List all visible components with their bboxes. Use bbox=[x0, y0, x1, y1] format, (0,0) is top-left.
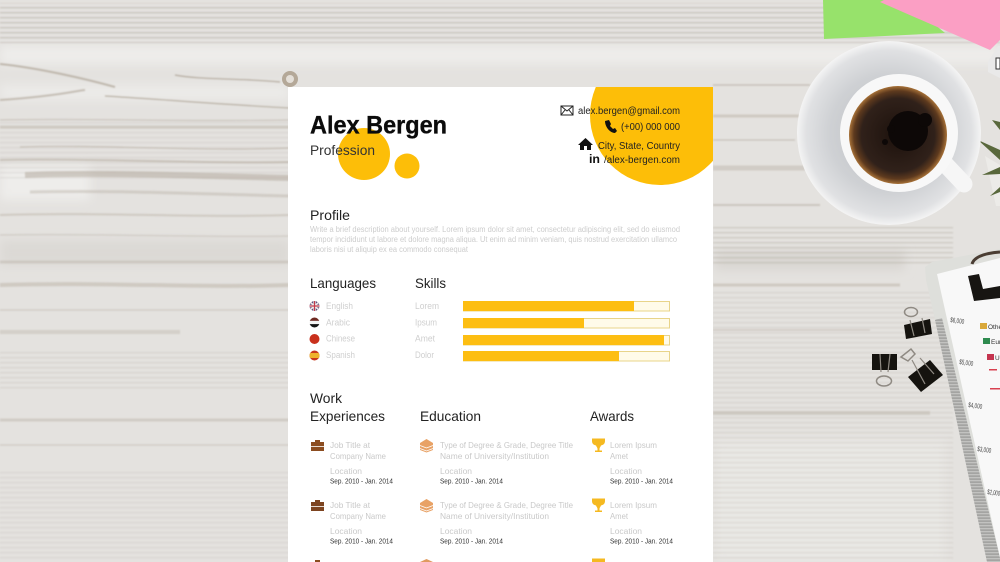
work item 1: Company Name bbox=[330, 451, 386, 461]
education item 1 bbox=[420, 439, 573, 486]
icon: home bbox=[578, 138, 593, 150]
education item 2: Name of University/Institution bbox=[440, 511, 549, 521]
binder clip 3 bbox=[901, 349, 943, 392]
work item 1: Location bbox=[330, 466, 362, 476]
profile text bbox=[310, 225, 680, 254]
decorative yellow circles bbox=[338, 87, 713, 185]
education item 1: Type of Degree & Grade, Degree Title bbox=[440, 440, 573, 450]
chart axis labels: $3,000 bbox=[977, 446, 992, 455]
cup handle bbox=[946, 165, 964, 184]
work item 3 icon bbox=[311, 560, 320, 562]
language: arabic: Arabic bbox=[326, 318, 350, 328]
profile text: tempor incididunt ut labore et dolore magna aliqua. Ut enim ad minim veniam, quis nostrud exercitation ullamco bbox=[310, 235, 678, 244]
award item 1 bbox=[592, 438, 673, 486]
award item 2 bbox=[592, 498, 673, 546]
work item 2: Job Title at bbox=[330, 500, 371, 510]
paper bbox=[937, 258, 1000, 562]
binder clips bbox=[872, 308, 943, 392]
work item 2: Sep. 2010 - Jan. 2014 bbox=[330, 538, 393, 546]
name: Alex Bergen bbox=[310, 112, 447, 140]
work item 2: Company Name bbox=[330, 511, 386, 521]
education item 1: Name of University/Institution bbox=[440, 451, 549, 461]
heading: awards: Awards bbox=[590, 408, 634, 424]
skill: amet: Amet bbox=[415, 334, 435, 344]
sticky notes bbox=[823, 0, 1000, 50]
profession: Profession bbox=[310, 142, 375, 158]
binder clip 2 bbox=[872, 354, 897, 386]
green note bbox=[823, 0, 945, 39]
icon: email bbox=[561, 106, 573, 115]
skill: lorem bbox=[415, 301, 670, 311]
award item 2: Sep. 2010 - Jan. 2014 bbox=[610, 538, 673, 546]
heading: languages: Languages bbox=[310, 275, 376, 291]
profile text: laboris nisi ut aliquip ex ea commodo consequat bbox=[310, 245, 469, 254]
education item 1: Sep. 2010 - Jan. 2014 bbox=[440, 478, 503, 486]
award item 1: Lorem Ipsum bbox=[610, 440, 657, 450]
cup rim bbox=[840, 74, 958, 192]
skill: dolor bbox=[415, 350, 670, 361]
award item 3 icon bbox=[592, 558, 605, 562]
coffee bbox=[849, 86, 947, 184]
heading: work experiences: Work bbox=[310, 390, 343, 406]
skill: dolor: Dolor bbox=[415, 350, 434, 360]
work item 2: Location bbox=[330, 526, 362, 536]
ribbed board edge bbox=[935, 318, 1000, 562]
education item 2: Sep. 2010 - Jan. 2014 bbox=[440, 538, 503, 546]
award item 2: Lorem Ipsum bbox=[610, 500, 657, 510]
award item 1: Sep. 2010 - Jan. 2014 bbox=[610, 478, 673, 486]
icon: linkedin: in bbox=[589, 152, 600, 166]
coffee cup and saucer bbox=[797, 41, 981, 225]
education item 3 icon bbox=[420, 559, 433, 562]
calculator corner bbox=[988, 46, 1000, 78]
skill: amet bbox=[415, 334, 670, 345]
awards section bbox=[590, 408, 673, 562]
education item 1: Location bbox=[440, 466, 472, 476]
education item 2: Type of Degree & Grade, Degree Title bbox=[440, 500, 573, 510]
skill: ipsum: Ipsum bbox=[415, 318, 437, 328]
language: english: English bbox=[326, 301, 353, 311]
work item 1: Job Title at bbox=[330, 440, 371, 450]
award item 1: Location bbox=[610, 466, 642, 476]
chart axis labels bbox=[950, 317, 1000, 498]
chart legend bbox=[980, 323, 1000, 390]
chart axis labels: $5,000 bbox=[959, 359, 974, 368]
work item 1 bbox=[311, 440, 393, 486]
chart axis labels: $4,000 bbox=[968, 402, 983, 411]
chart axis labels: $6,000 bbox=[950, 317, 965, 326]
profile section bbox=[310, 207, 680, 254]
profile text: Write a brief description about yourself. Lorem ipsum dolor sit amet, consectetur adipiscing elit, sed do eiusmod bbox=[310, 225, 680, 234]
board bbox=[925, 249, 1000, 562]
address: City, State, Country bbox=[598, 141, 680, 152]
education section bbox=[420, 408, 573, 562]
binder clip 1 bbox=[904, 308, 932, 339]
phone: (+00) 000 000 bbox=[621, 122, 680, 133]
work experiences section bbox=[310, 390, 393, 562]
award item 2: Location bbox=[610, 526, 642, 536]
language: spanish: Spanish bbox=[326, 350, 355, 360]
skills section bbox=[415, 275, 670, 361]
website: /alex-bergen.com bbox=[604, 155, 680, 166]
work item 2 bbox=[311, 500, 393, 546]
education item 2 bbox=[420, 499, 573, 546]
language: chinese: Chinese bbox=[326, 334, 355, 344]
work experiences section: Experiences bbox=[310, 408, 385, 424]
languages section bbox=[309, 275, 376, 361]
work item 1: Sep. 2010 - Jan. 2014 bbox=[330, 478, 393, 486]
heading: skills: Skills bbox=[415, 275, 446, 291]
icon: phone bbox=[605, 120, 617, 133]
resume page bbox=[288, 87, 713, 562]
heading: profile: Profile bbox=[310, 207, 350, 223]
metal clip bbox=[968, 274, 1000, 301]
pink note bbox=[880, 0, 1000, 50]
saucer bbox=[797, 41, 981, 225]
award item 2: Amet bbox=[610, 511, 629, 521]
plant pot and leaves bbox=[978, 120, 1000, 206]
contact details bbox=[561, 106, 680, 166]
award item 1: Amet bbox=[610, 451, 629, 461]
email: alex.bergen@gmail.com bbox=[578, 106, 680, 117]
heading: education: Education bbox=[420, 408, 481, 424]
education item 2: Location bbox=[440, 526, 472, 536]
skill: ipsum bbox=[415, 318, 670, 328]
clipboard bbox=[925, 249, 1000, 562]
skill: lorem: Lorem bbox=[415, 301, 439, 311]
